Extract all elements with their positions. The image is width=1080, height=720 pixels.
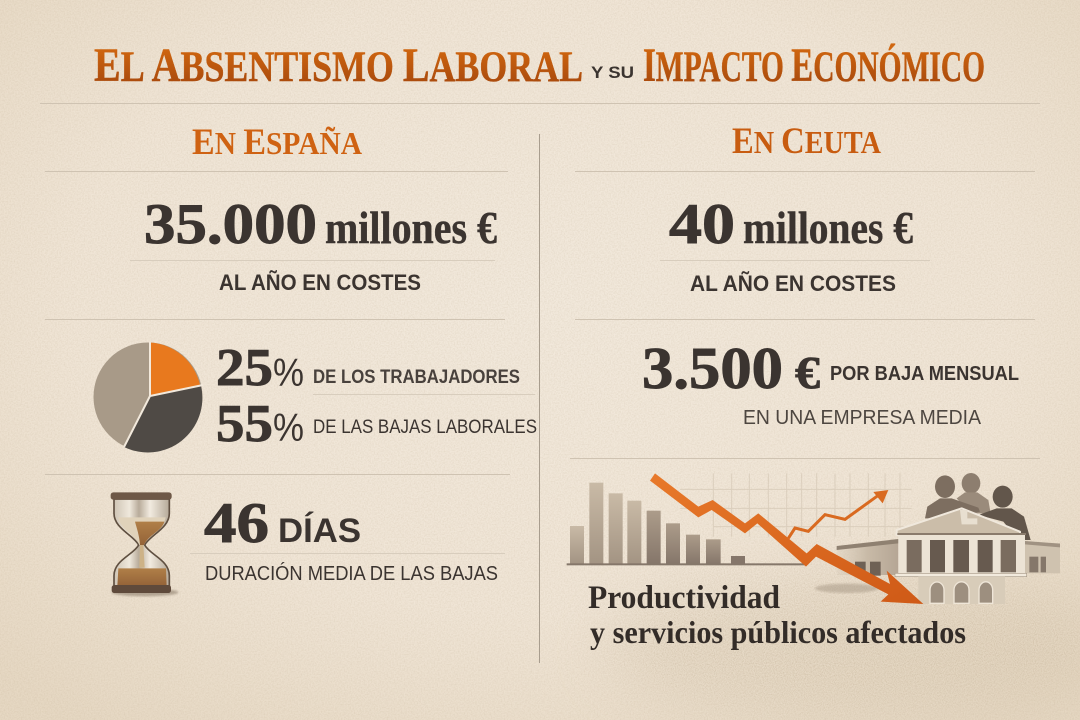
stat: 25% of workers: DE LOS TRABAJADORES: [313, 367, 520, 388]
people silhouettes: [925, 473, 1031, 540]
stat: 25% of workers: %: [273, 352, 304, 395]
stat: 3.500 euros per monthly leave: [642, 335, 1019, 429]
arrow: large falling trend: [650, 473, 923, 604]
stat: Spain annual cost: millones €: [325, 202, 497, 253]
arrow: small rising trend: [788, 490, 888, 538]
caption: productivity and public services affected: y servicios públicos afectados: [590, 614, 966, 650]
shadow on the ground: [815, 584, 878, 593]
stat: Spain annual cost: [144, 193, 497, 295]
title: EL ABSENTISMO LABORAL: [94, 39, 583, 92]
stat: 46 days average duration: [204, 492, 498, 585]
stat: 3.500 euros per monthly leave: €: [795, 347, 820, 398]
stat: Ceuta annual cost: AL AÑO EN COSTES: [690, 271, 896, 296]
left wing windows: [855, 562, 881, 576]
stat: Spain annual cost: 35.000: [144, 193, 317, 256]
title: [94, 39, 985, 92]
stat: Ceuta annual cost: millones €: [743, 202, 913, 253]
stat: Spain annual cost: AL AÑO EN COSTES: [219, 270, 421, 295]
stat: 55% of sick leave: DE LAS BAJAS LABORALES: [313, 417, 537, 438]
stat: 3.500 euros per monthly leave: 3.500: [642, 335, 783, 401]
bar chart: [567, 483, 807, 565]
title: Y SU: [591, 63, 634, 82]
caption: productivity and public services affected: [588, 580, 966, 650]
stat: 3.500 euros per monthly leave: EN UNA EMPRESA MEDIA: [743, 407, 982, 429]
stat: 46 days average duration: DÍAS: [278, 512, 361, 550]
stat: Ceuta annual cost: 40: [669, 193, 735, 256]
building with columns: [837, 508, 1060, 604]
stat: Ceuta annual cost: [669, 193, 913, 296]
heading: En España: EN ESPAÑA: [192, 122, 362, 163]
stat: 3.500 euros per monthly leave: POR BAJA MENSUAL: [830, 363, 1019, 385]
heading: En Ceuta: EN CEUTA: [732, 121, 881, 162]
stat: 55% of sick leave: [216, 395, 537, 453]
icon: hourglass: [111, 492, 178, 596]
background grid: [680, 473, 912, 537]
stat: 46 days average duration: 46: [204, 492, 269, 555]
stat: 55% of sick leave: %: [273, 407, 304, 450]
stat: 55% of sick leave: 55: [216, 395, 273, 453]
pie chart: share of workers and sick leave: [94, 342, 203, 452]
caption: productivity and public services affected: Productividad: [588, 580, 780, 616]
stat: 46 days average duration: DURACIÓN MEDIA DE LAS BAJAS: [205, 562, 498, 585]
illustration: falling productivity and public services: [567, 473, 1060, 604]
stat: 25% of workers: [216, 339, 520, 397]
title: IMPACTO ECONÓMICO: [643, 39, 985, 92]
stat: 25% of workers: 25: [216, 339, 273, 397]
